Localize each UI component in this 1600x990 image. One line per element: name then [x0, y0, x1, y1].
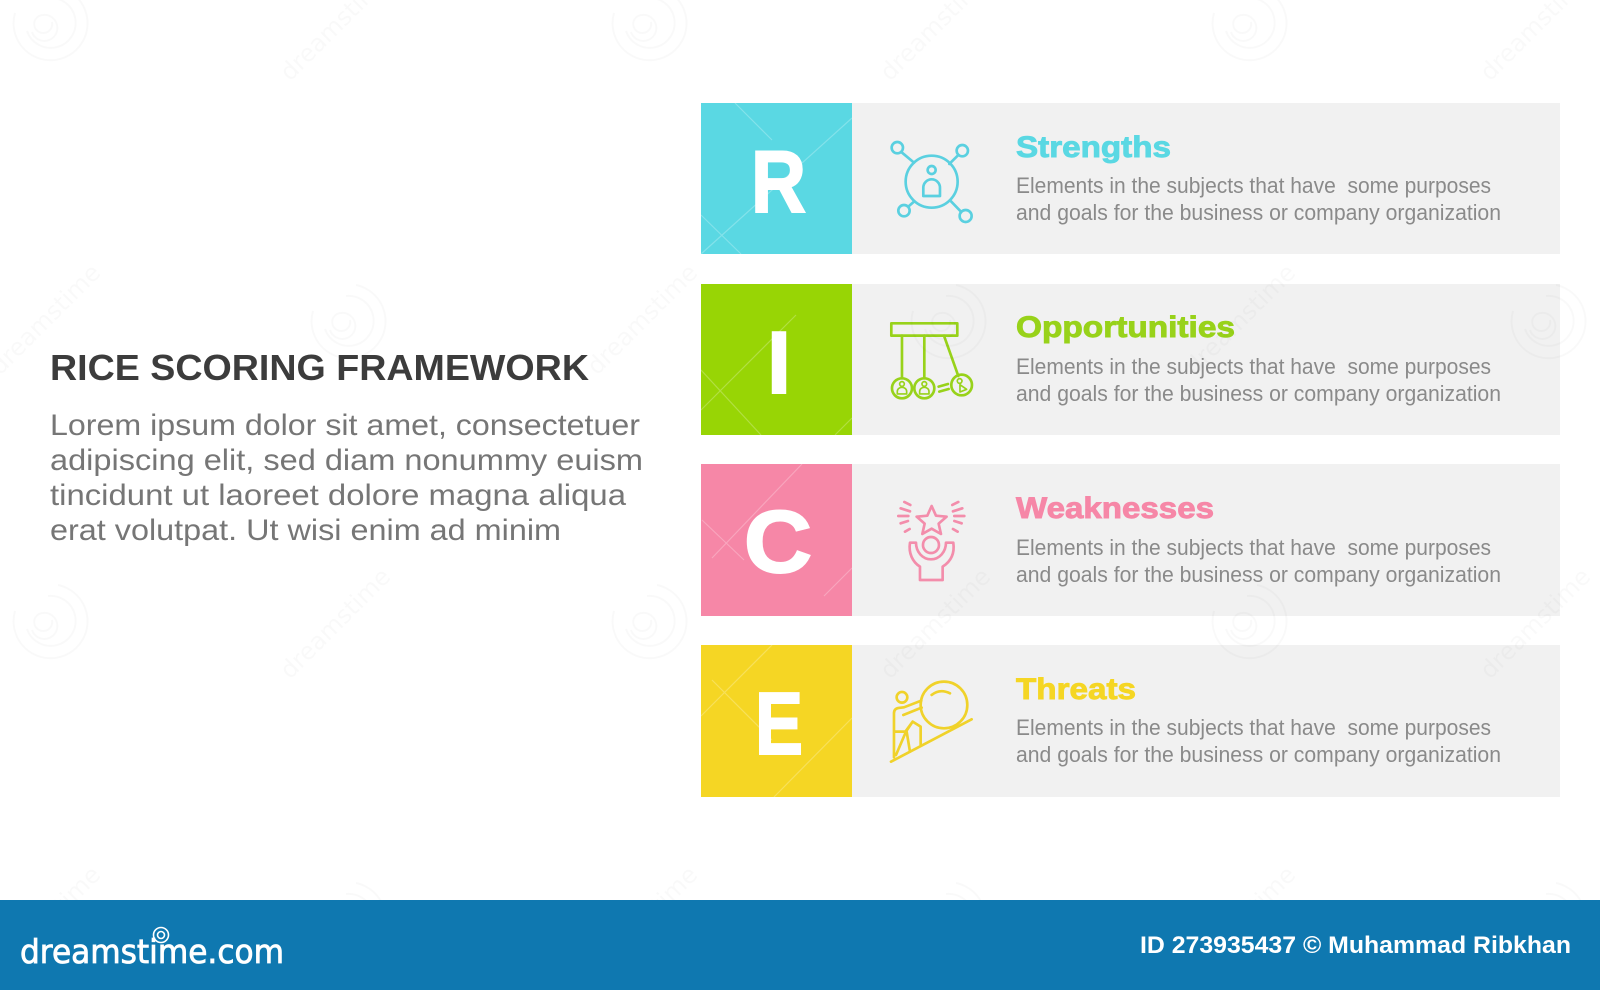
- description: Strengths: [1016, 173, 1501, 225]
- heading: Strengths: Strengths: [1016, 131, 1171, 164]
- letter tile R: R: [751, 132, 806, 231]
- description: Strengths: Elements in the subjects that have some purposes: [1016, 173, 1491, 198]
- letter tile C: C: [744, 492, 812, 591]
- description: Threats: [1016, 715, 1501, 767]
- description: Weaknesses: and goals for the business or company organization: [1016, 562, 1501, 587]
- icon: network person: [892, 142, 972, 222]
- intro text block: tincidunt ut laoreet dolore magna aliqua: [50, 479, 626, 512]
- watermark pattern: dreamstime: [581, 259, 703, 380]
- letter tile R: [701, 103, 852, 254]
- heading: Opportunities: Opportunities: [1016, 311, 1235, 344]
- watermark pattern: dreamstime: [1179, 259, 1301, 380]
- description: Threats: Elements in the subjects that have some purposes: [1016, 715, 1491, 740]
- description: Weaknesses: Elements in the subjects that have some purposes: [1016, 535, 1491, 560]
- description: Strengths: and goals for the business or company organization: [1016, 200, 1501, 225]
- intro text block: [50, 409, 643, 547]
- description: Opportunities: Elements in the subjects that have some purposes: [1016, 354, 1491, 379]
- watermark pattern: dreamstime: [1474, 563, 1596, 684]
- watermark pattern: dreamstime: [1179, 861, 1301, 982]
- icon: newton cradle: [891, 323, 972, 398]
- panel: R strengths: [701, 103, 1560, 254]
- watermark pattern: dreamstime: [581, 861, 703, 982]
- footer banner: [0, 900, 1600, 990]
- letter tile I: I: [767, 313, 791, 412]
- description: Threats: and goals for the business or company organization: [1016, 742, 1501, 767]
- watermark pattern: dreamstime: [874, 563, 996, 684]
- logo spiral icon: [154, 928, 168, 942]
- logo wordmark: dreamstime.com: [20, 932, 284, 971]
- panel: E threats: [701, 645, 1560, 797]
- icon: person pushing boulder: [891, 682, 972, 762]
- icon: person lifting star: [898, 502, 964, 580]
- letter tile E: E: [755, 674, 803, 773]
- image id and credit: ID 273935437 © Muhammad Ribkhan: [1140, 932, 1571, 959]
- heading: Weaknesses: Weaknesses: [1016, 492, 1214, 525]
- description: Weaknesses: [1016, 535, 1501, 587]
- description: Opportunities: [1016, 354, 1501, 406]
- letter tile I: [701, 284, 852, 435]
- intro text block: erat volutpat. Ut wisi enim ad minim: [50, 514, 561, 547]
- heading: Threats: Threats: [1016, 673, 1136, 706]
- letter tile E: [701, 645, 852, 797]
- panel: C weaknesses: [701, 464, 1560, 616]
- watermark pattern: dreamstime: [274, 563, 396, 684]
- intro text block: adipiscing elit, sed diam nonummy euism: [50, 444, 643, 477]
- description: Opportunities: and goals for the business or company organization: [1016, 381, 1501, 406]
- title: RICE SCORING FRAMEWORK: [50, 347, 589, 388]
- intro text block: Lorem ipsum dolor sit amet, consectetuer: [50, 409, 640, 442]
- panel: I opportunities: [701, 284, 1560, 435]
- letter tile C: [701, 464, 852, 616]
